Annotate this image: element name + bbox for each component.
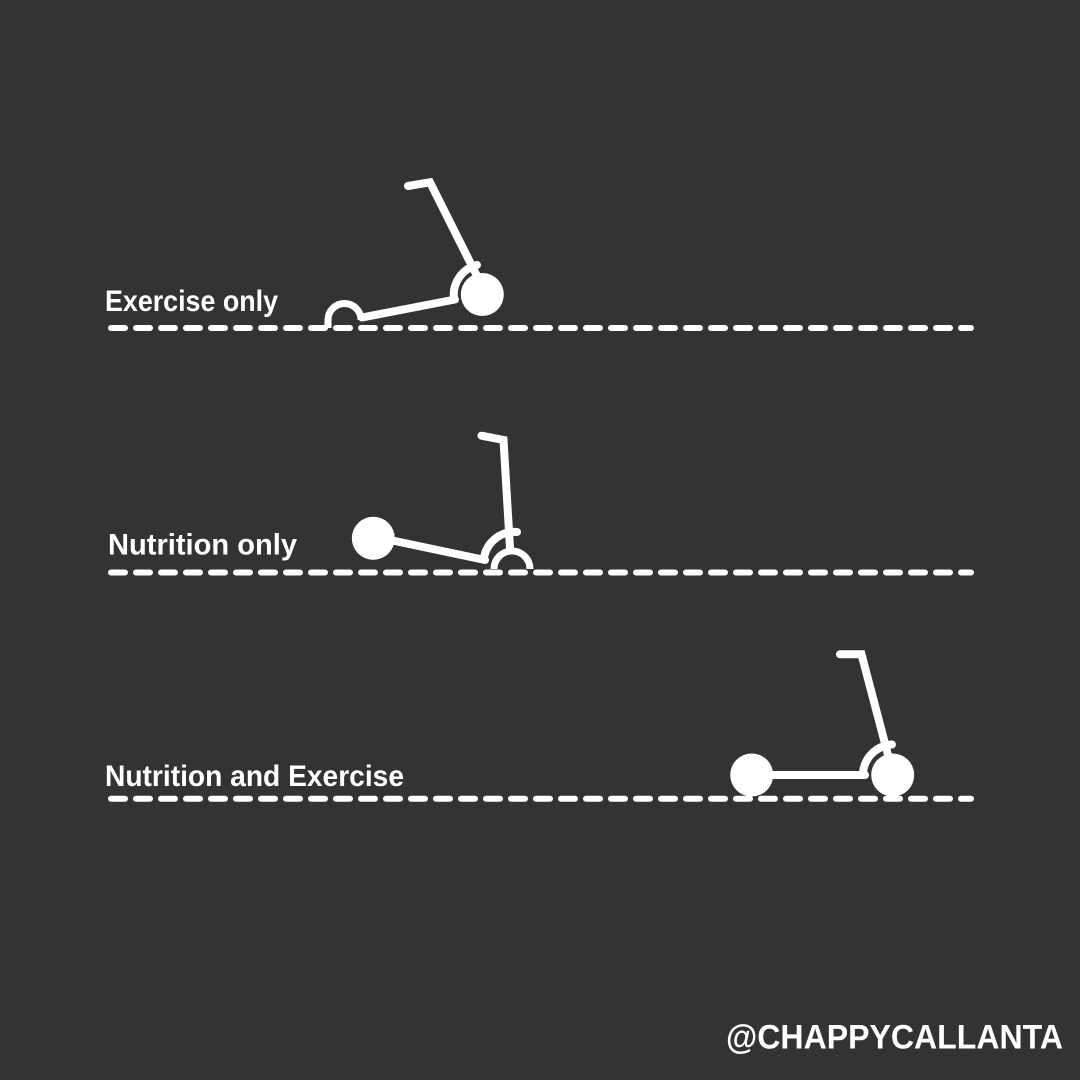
label: nutrition only: Nutrition only xyxy=(108,528,297,562)
track: nutrition only xyxy=(111,570,971,576)
icon: level scooter with two full wheels xyxy=(730,654,914,796)
row: nutrition only xyxy=(108,436,971,572)
icon: tilted scooter, front wheel flat xyxy=(352,436,530,569)
track: nutrition and exercise xyxy=(111,796,971,802)
row: exercise only xyxy=(105,182,971,328)
label: exercise only: Exercise only xyxy=(105,285,278,318)
icon: tilted scooter, rear wheel flat xyxy=(328,182,504,328)
track: exercise only xyxy=(111,325,971,331)
label: nutrition and exercise: Nutrition and Exercise xyxy=(105,760,404,793)
row: nutrition and exercise xyxy=(105,654,971,799)
credit handle: @CHAPPYCALLANTA xyxy=(726,1018,1063,1056)
